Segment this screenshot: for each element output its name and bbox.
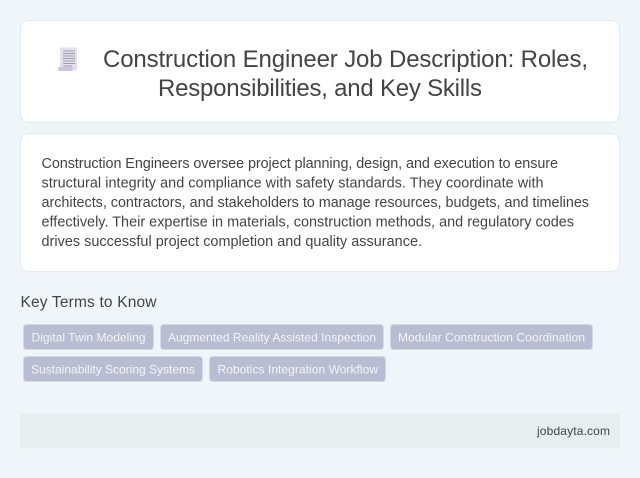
heading: title: Construction Engineer Job Description: Roles, (103, 46, 588, 73)
footer bar (20, 414, 620, 448)
tag: Digital Twin Modeling (24, 324, 154, 350)
tag: Sustainability Scoring Systems (24, 356, 202, 382)
text block: description: structural integrity and compliance with safety standards. They coordinate with (42, 176, 544, 192)
footer text: site name: jobdayta.com (536, 424, 610, 438)
tag: Modular Construction Coordination: Modular Construction Coordination (398, 330, 585, 344)
tag: Robotics Integration Workflow (210, 356, 386, 382)
heading: title: Responsibilities, and Key Skills (158, 75, 482, 102)
text block: description: architects, contractors, and stakeholders to manage resources, budgets, and timelines (42, 195, 589, 211)
text block: description: Construction Engineers oversee project planning, design, and execution to ensure (42, 156, 558, 172)
tag: Augmented Reality Assisted Inspection (160, 324, 384, 350)
panel: title card (20, 20, 620, 122)
tag: Robotics Integration Workflow: Robotics Integration Workflow (218, 362, 378, 376)
panel: description card (20, 134, 620, 272)
tag: Modular Construction Coordination (390, 324, 592, 350)
tag: Digital Twin Modeling: Digital Twin Modeling (32, 330, 146, 344)
text block: description (42, 156, 589, 250)
heading: key terms: Key Terms to Know (20, 294, 157, 311)
icon: document scroll (58, 48, 77, 71)
text block: description: drives successful project completion and quality assurance. (42, 234, 422, 250)
tag: Augmented Reality Assisted Inspection: Augmented Reality Assisted Inspection (168, 330, 376, 344)
heading: title (103, 46, 588, 102)
text block: description: effectively. Their expertise in materials, construction methods, and regulatory codes (42, 214, 574, 230)
tag: Sustainability Scoring Systems: Sustainability Scoring Systems (31, 362, 195, 376)
